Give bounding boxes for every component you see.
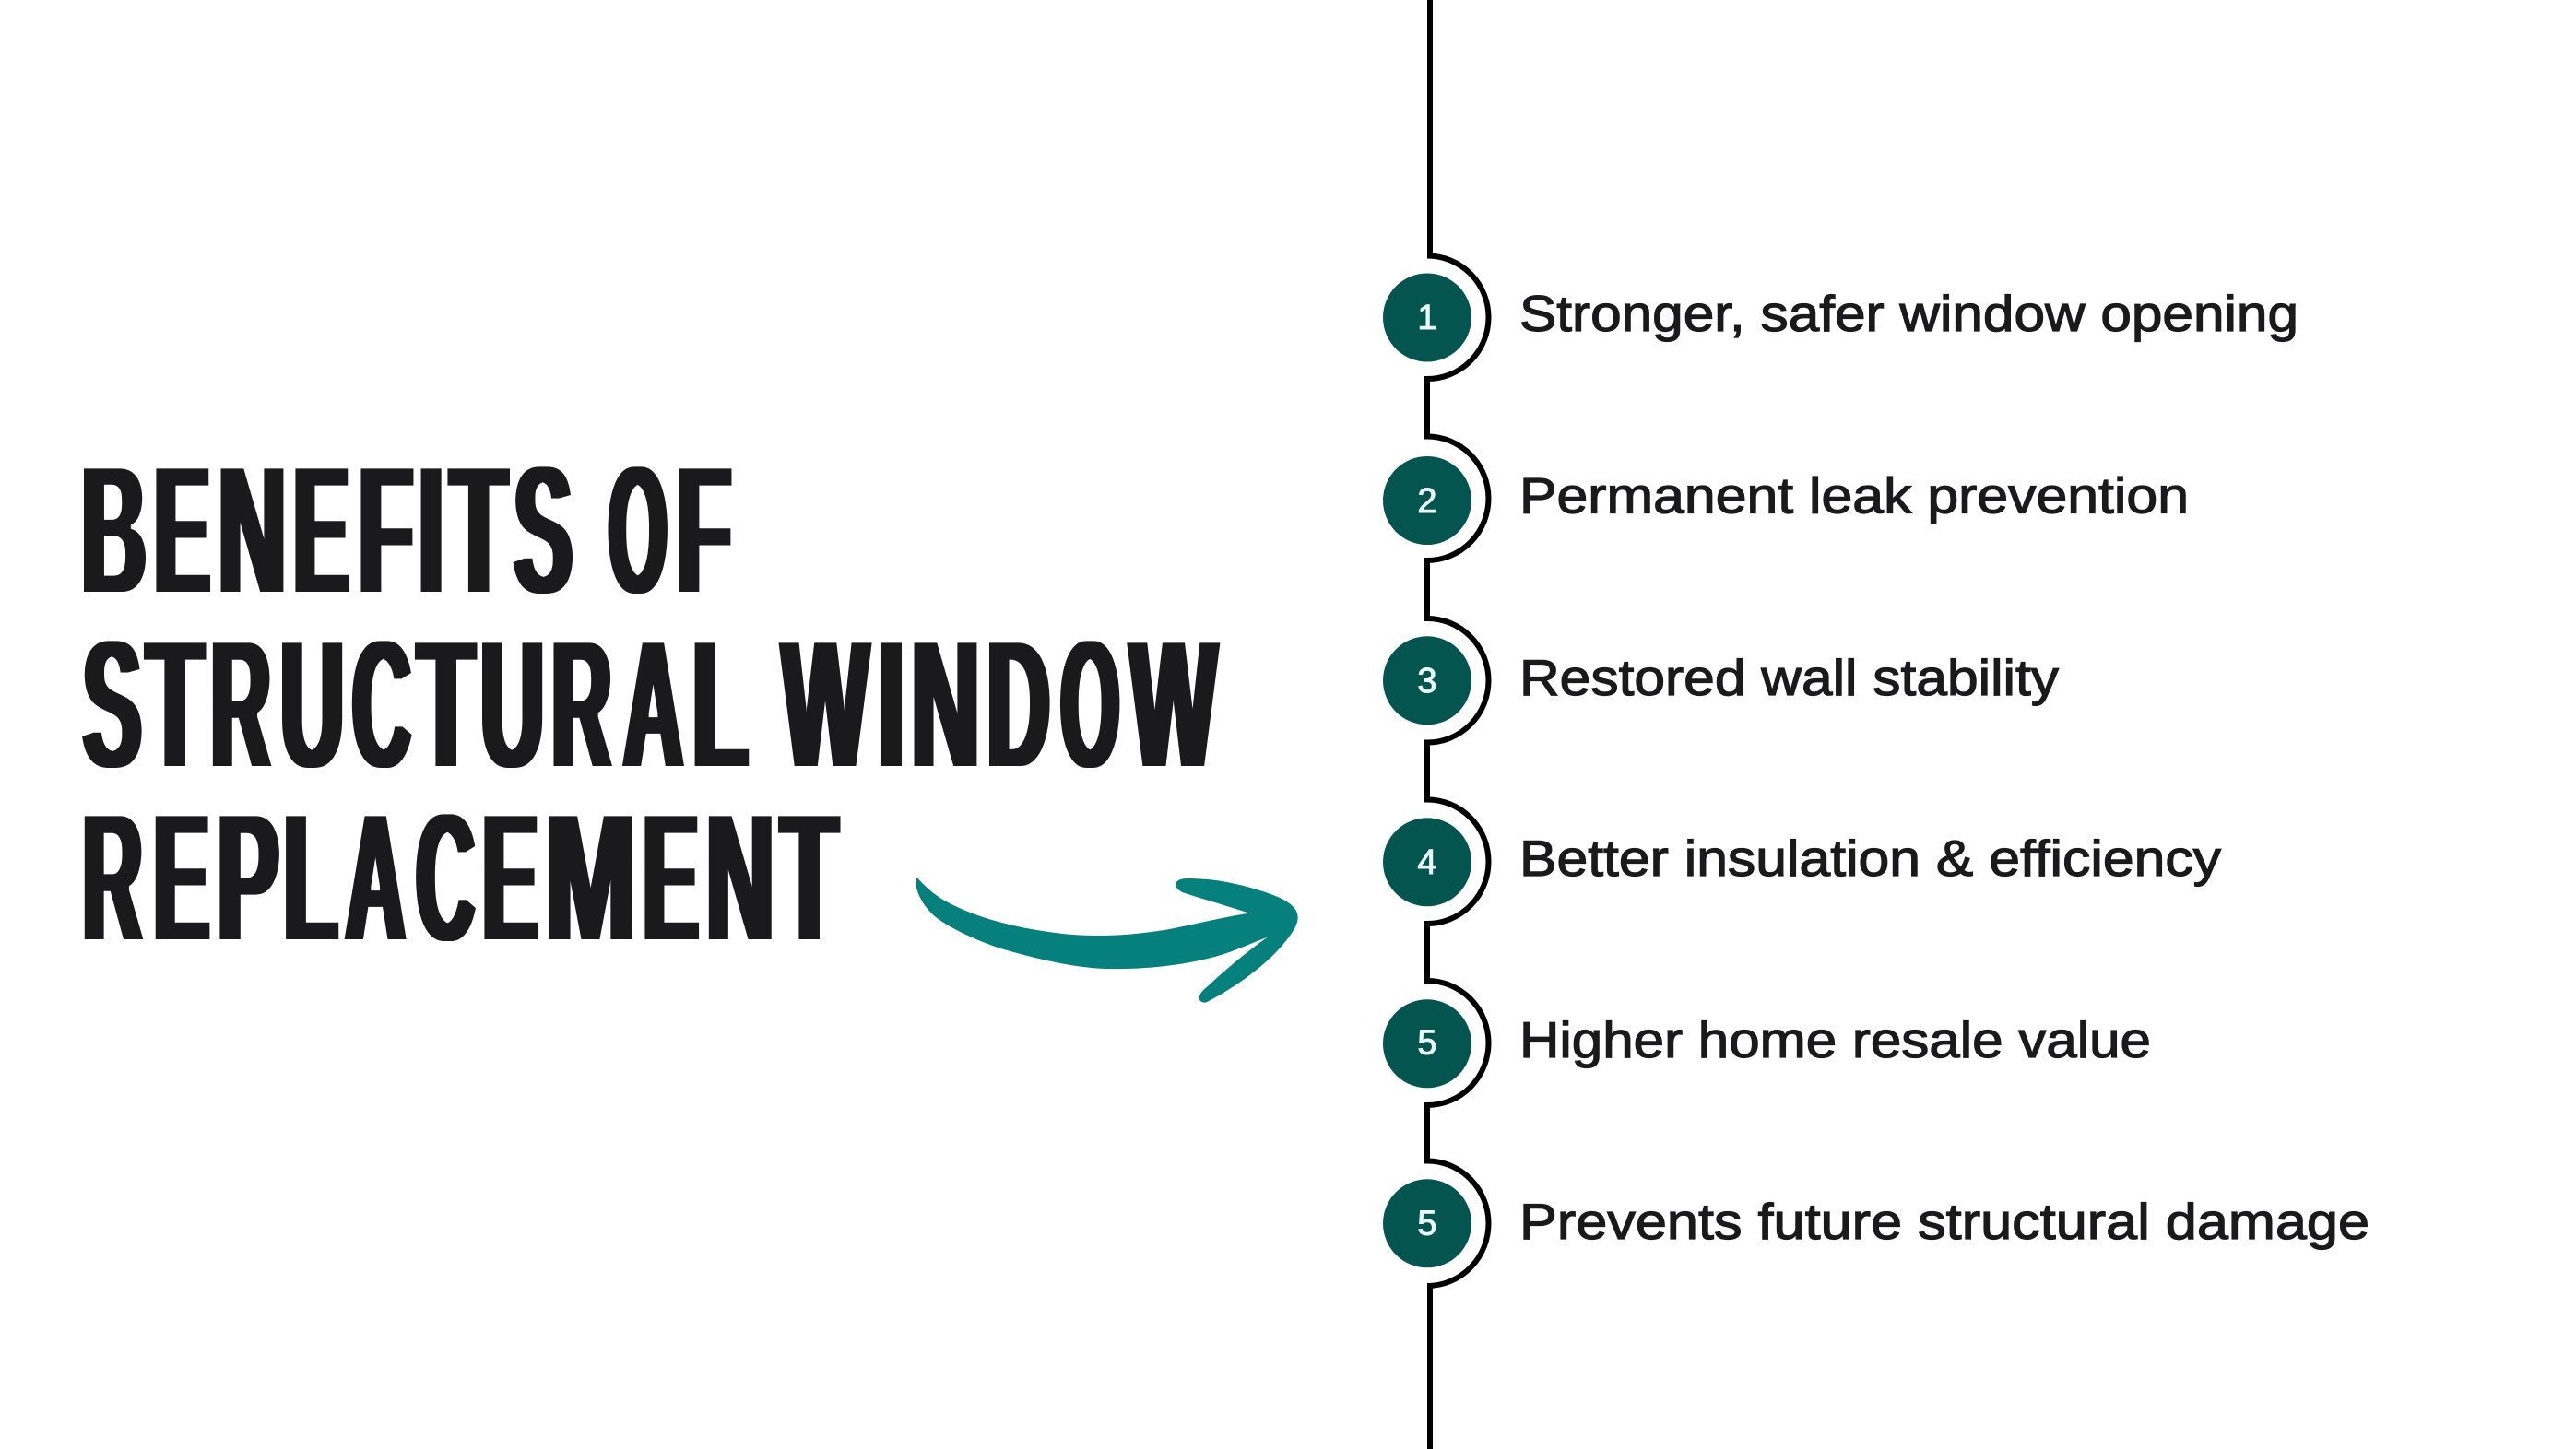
item 1	[1383, 273, 2298, 361]
title: N	[706, 775, 774, 981]
number badge 6	[1383, 1179, 1471, 1267]
number badge 6: 5	[1417, 1204, 1437, 1243]
title: S	[83, 602, 141, 807]
title	[81, 428, 1217, 981]
number badge 5	[1383, 999, 1471, 1088]
title: O	[1061, 602, 1119, 807]
item 6	[1383, 1179, 2369, 1267]
title: W	[1130, 602, 1217, 807]
title: E	[293, 428, 349, 633]
number badge 5: 5	[1417, 1023, 1437, 1062]
title: M	[546, 775, 635, 981]
item 3	[1383, 636, 2060, 724]
title: T	[418, 602, 475, 807]
label 2: Permanent leak prevention	[1519, 466, 2189, 524]
title: N	[219, 428, 286, 633]
title: L	[692, 602, 747, 807]
title: B	[81, 428, 146, 633]
label 6: Prevents future structural damage	[1519, 1193, 2369, 1250]
title: F	[359, 428, 413, 633]
title: S	[514, 428, 573, 633]
title: C	[352, 602, 411, 807]
title: N	[912, 602, 979, 807]
title: D	[987, 602, 1050, 807]
number badge 1	[1383, 273, 1471, 361]
title: P	[218, 775, 278, 981]
title: W	[782, 602, 869, 807]
title: R	[551, 602, 611, 807]
item 4	[1383, 818, 2222, 906]
number badge 2	[1383, 456, 1471, 545]
label 5: Higher home resale value	[1519, 1011, 2151, 1068]
number badge 2: 2	[1417, 482, 1437, 521]
title: T	[781, 775, 838, 981]
title: E	[154, 775, 209, 981]
title: I	[879, 602, 904, 807]
title: I	[419, 428, 443, 633]
title: R	[211, 602, 270, 807]
number badge 1: 1	[1417, 299, 1437, 337]
title: E	[643, 775, 699, 981]
number badge 4	[1383, 818, 1471, 906]
item 2	[1383, 456, 2189, 545]
number badge 4: 4	[1417, 843, 1437, 882]
label 3: Restored wall stability	[1519, 649, 2060, 706]
label 4: Better insulation & efficiency	[1519, 830, 2222, 887]
label 1: Stronger, safer window opening	[1519, 285, 2298, 342]
title: A	[346, 775, 406, 981]
title: R	[83, 775, 142, 981]
arrow	[916, 878, 1298, 1003]
item 5	[1383, 999, 2151, 1088]
title: U	[480, 602, 544, 807]
number badge 3	[1383, 636, 1471, 724]
title: F	[677, 428, 731, 633]
title: O	[609, 428, 667, 633]
title: E	[482, 775, 538, 981]
number badge 3: 3	[1417, 662, 1437, 701]
title: T	[147, 602, 204, 807]
title: C	[417, 775, 475, 981]
title: U	[280, 602, 344, 807]
title: T	[450, 428, 507, 633]
title: E	[154, 428, 210, 633]
title: L	[284, 775, 337, 981]
timeline spine	[1427, 0, 1488, 1449]
title: A	[623, 602, 683, 807]
